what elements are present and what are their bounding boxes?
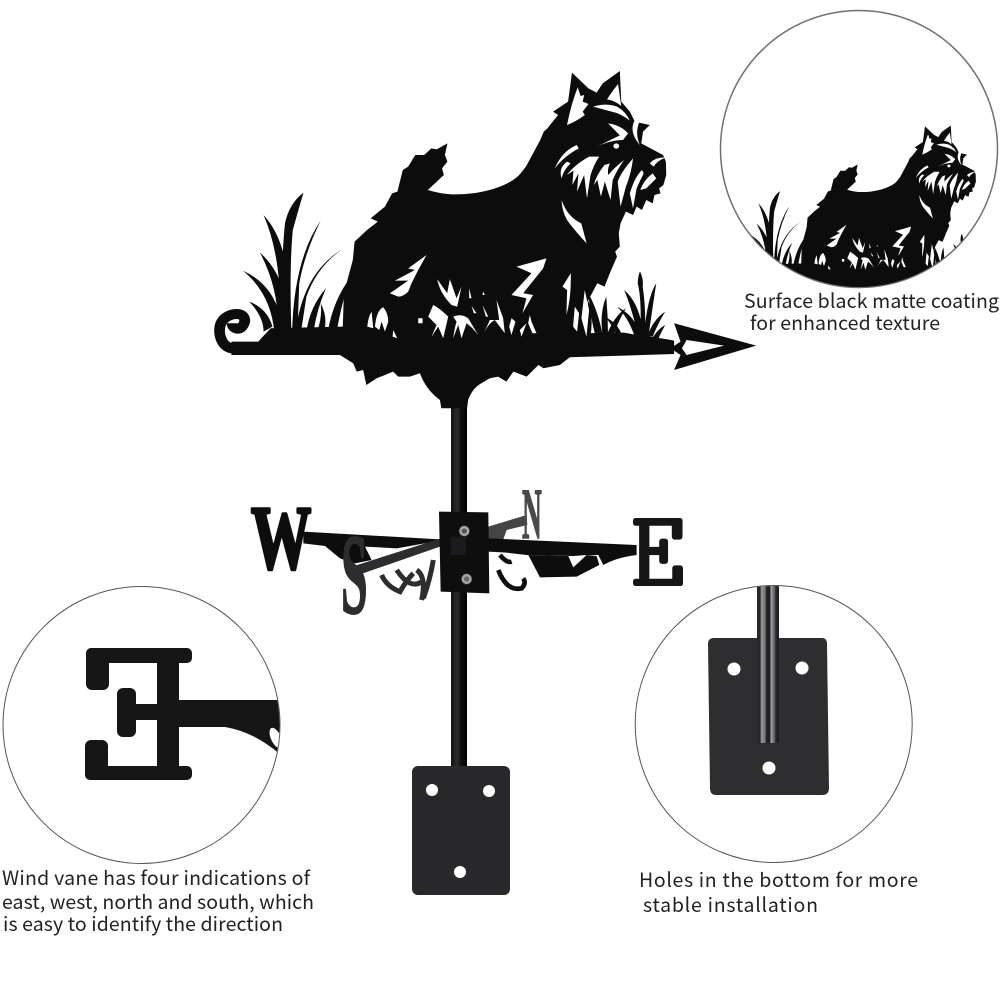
- enlarged plate: [708, 638, 829, 795]
- white cutouts: ears and face: [555, 84, 666, 243]
- letter N: N: [522, 473, 542, 554]
- arrow head: [671, 323, 756, 370]
- enlarged arm: [179, 700, 280, 752]
- bolt bottom: [461, 574, 472, 584]
- west arm: [303, 532, 440, 563]
- compass arms: [303, 512, 637, 600]
- eye: [613, 143, 619, 149]
- east arm with scroll: [488, 538, 637, 589]
- caption: matte coating: Surface black matte coating: [744, 285, 999, 314]
- post: [451, 400, 467, 772]
- caption: matte coating: for enhanced texture: [750, 307, 940, 336]
- caption: mounting holes: [639, 864, 918, 918]
- enlarged mirrored letter E: E: [102, 607, 192, 820]
- bracket: [439, 512, 489, 593]
- caption: compass letters: east, west, north and south, which: [2, 886, 314, 915]
- north arm: [488, 515, 527, 539]
- letter E: [633, 497, 683, 606]
- caption: mounting holes: stable installation: [643, 889, 818, 918]
- mounting plate: [412, 766, 510, 895]
- right grass: [581, 272, 665, 343]
- caption: compass letters: Wind vane has four indications of: [2, 862, 311, 891]
- panel: matte coating detail: [720, 10, 1000, 308]
- white cutouts: legs and grass under belly: [367, 255, 589, 338]
- panel: mounting holes detail: [635, 580, 912, 862]
- letter S: S: [341, 511, 368, 638]
- panel: letter detail: [3, 586, 285, 864]
- caption: mounting holes: Holes in the bottom for more: [639, 864, 918, 893]
- curl at tail of bar: [220, 314, 281, 349]
- letter W: W: [251, 488, 311, 588]
- enlarged post: [757, 580, 779, 743]
- bolt top: [459, 526, 470, 536]
- vane: terrier, grass and arrow silhouette: [220, 71, 756, 408]
- dog, bar and fringe silhouette: [231, 71, 674, 408]
- caption: compass letters: [2, 862, 314, 937]
- south arm with scroll: [347, 539, 440, 600]
- left grass: [243, 193, 351, 332]
- caption: compass letters: is easy to identify the direction: [3, 908, 283, 937]
- caption: matte coating: [744, 285, 999, 336]
